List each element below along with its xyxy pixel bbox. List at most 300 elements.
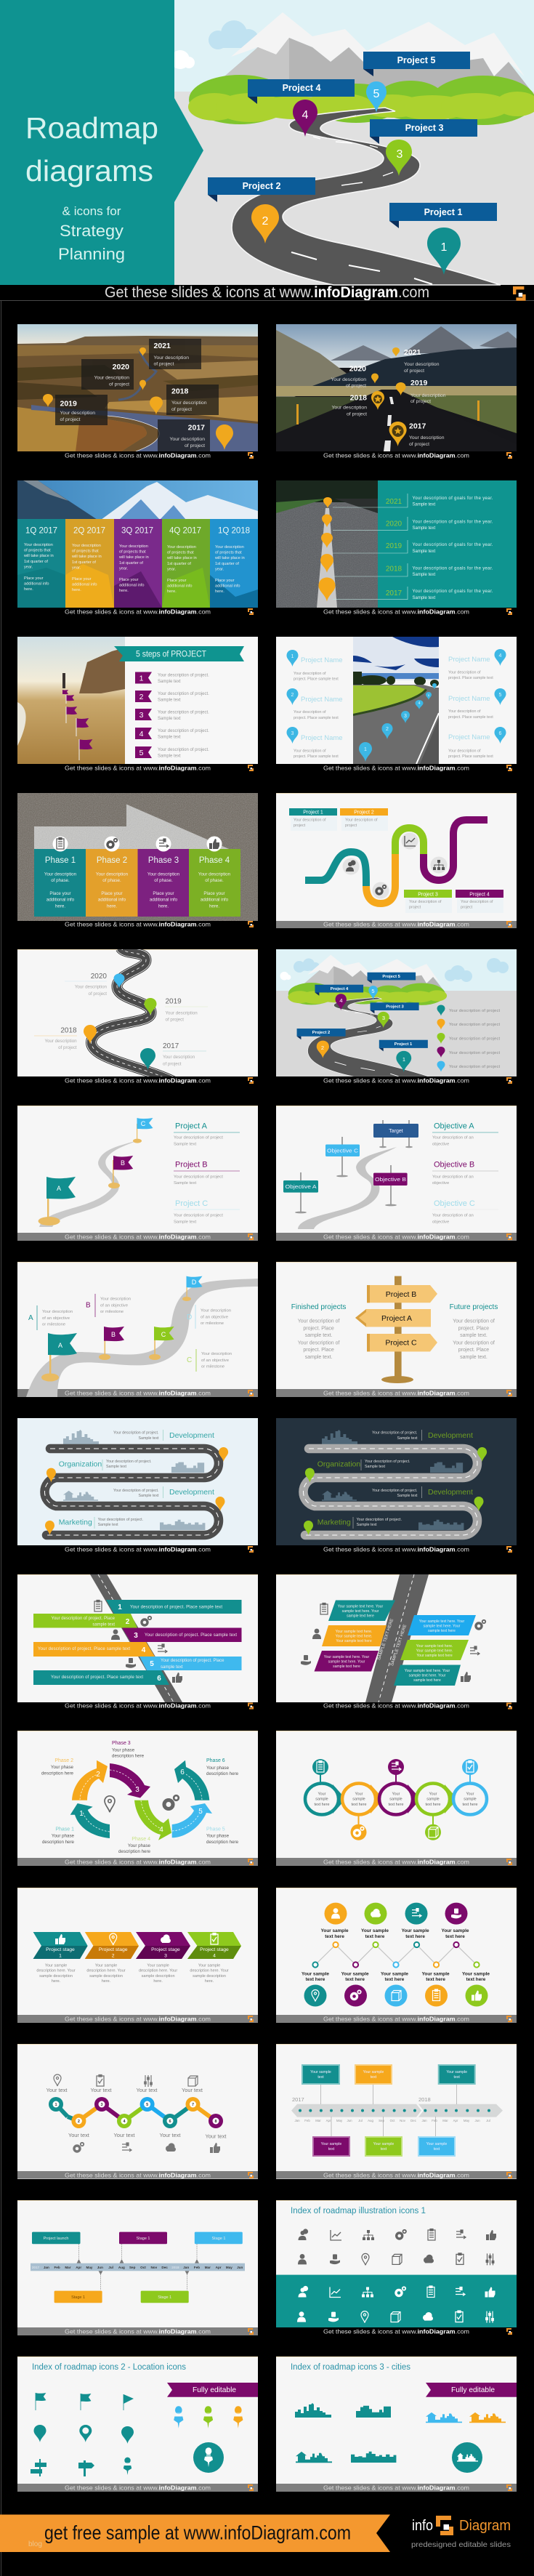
- slide 1: photo timeline with dark year boxes: Your description: [94, 375, 129, 381]
- phase descriptions: of phase.: [205, 878, 224, 883]
- phase texts: Your phase: [52, 1834, 75, 1839]
- block text: Your sample text here.: [416, 1644, 453, 1649]
- pin numbers: 6: [499, 731, 502, 736]
- step descriptions: Sample text: [158, 698, 181, 702]
- wave connectors: [56, 2104, 216, 2121]
- objective list: Objective A: [434, 1122, 474, 1130]
- side icons: [94, 1601, 182, 1683]
- month strip: 2017: [32, 2266, 40, 2269]
- slide 5: beach photo with five steps list: 4: [139, 730, 144, 738]
- phase texts: Your phase: [128, 1843, 151, 1848]
- footer bar: [17, 1858, 258, 1866]
- milestone notes: Your description: [201, 1352, 232, 1356]
- node labels: text here: [325, 1934, 344, 1939]
- finished projects: Your description of: [298, 1340, 340, 1346]
- footer bar: Get these slides & icons at www. infoDiagram .com: [323, 608, 469, 615]
- signpost: [355, 1276, 437, 1383]
- milestone notes: A: [28, 1314, 33, 1322]
- slide 1: photo timeline with dark year boxes: of project: [154, 362, 174, 366]
- hero banner and pin labels: [243, 55, 462, 217]
- goal descriptions: Sample text: [413, 596, 436, 600]
- flags: [39, 1118, 153, 1225]
- bar text: Your description of project. Place: [161, 1659, 224, 1663]
- year and month labels: 2017: [292, 2096, 304, 2103]
- category labels: [317, 1431, 473, 1526]
- banner labels: Project 4: [331, 987, 349, 991]
- project label boxes: Your description of: [409, 900, 442, 904]
- footer bar: Get these slides & icons at www. infoDiagram .com: [65, 2327, 211, 2335]
- project label boxes: [289, 808, 503, 913]
- bar text: Your description of project. Place sample text: [145, 1633, 237, 1638]
- phase descriptions: additional info: [201, 898, 229, 903]
- phase titles: [45, 856, 230, 863]
- star pins: [371, 347, 407, 446]
- footer bar: [276, 2484, 517, 2492]
- step descriptions: Sample text: [158, 680, 181, 684]
- objective list: [432, 1122, 498, 1225]
- month strip: Dec: [161, 2266, 168, 2269]
- node labels: [46, 2087, 226, 2140]
- objective list: Your description of an: [432, 1175, 474, 1180]
- slide 12: road signs with objectives: [276, 1106, 517, 1241]
- phase texts: Phase 1: [55, 1827, 74, 1832]
- column descriptions: additional info: [72, 583, 97, 587]
- project descriptions: project. Place sample text: [294, 754, 339, 759]
- project label boxes: project: [345, 824, 357, 828]
- footer bar: Get these slides & icons at www. infoDiagram .com: [323, 1390, 469, 1397]
- descriptions: of project: [163, 1062, 182, 1067]
- quarter headings: 2Q 2017: [73, 526, 105, 535]
- phase descriptions: Your description: [147, 872, 179, 877]
- parallelogram blocks: [314, 1601, 476, 1686]
- slide 2: highway photo timeline with star pins: Your description: [331, 377, 366, 382]
- year labels: 2020: [91, 973, 107, 981]
- future projects: Future projects: [450, 1303, 498, 1311]
- teal ribbon heading: [114, 646, 244, 661]
- nodes: 8: [214, 2120, 217, 2124]
- ring text: [315, 1792, 477, 1807]
- column descriptions: Place your: [215, 579, 235, 583]
- road descriptions: Your description of project.: [357, 1518, 402, 1522]
- stage boxes: Stage 1: [137, 2237, 150, 2241]
- stage boxes: Stage 1: [212, 2237, 225, 2241]
- infoDiagram brand logo: predesigned editable slides: [411, 2540, 511, 2549]
- column descriptions: 1st quarter of: [24, 560, 48, 564]
- project descriptions: project. Place sample text: [294, 677, 339, 682]
- dark icon rows: [298, 2229, 496, 2265]
- goal descriptions: Sample text: [413, 573, 436, 577]
- slide 2: highway photo timeline with star pins: Your description: [409, 435, 445, 440]
- timeline arrows: [291, 2104, 503, 2117]
- footer bar: Get these slides & icons at www. infoDiagram .com: [65, 1390, 211, 1397]
- road descriptions: Sample text: [139, 1494, 159, 1498]
- orange call-to-action ribbon: get free sample at www.infoDiagram.com: [44, 2522, 351, 2544]
- column descriptions: additional info: [119, 583, 145, 587]
- project label boxes: Project 4: [469, 893, 490, 897]
- node labels: Your sample: [302, 1971, 329, 1977]
- slide 5: beach photo with five steps list: 2: [139, 693, 144, 701]
- quarter headings: 4Q 2017: [169, 526, 201, 535]
- category labels: Development: [169, 1431, 214, 1440]
- year and month labels: Mar: [442, 2119, 448, 2122]
- chevron labels: Project stage: [99, 1947, 128, 1952]
- orange call-to-action ribbon: blog: [28, 2540, 42, 2548]
- bar numbers: 2: [126, 1618, 130, 1626]
- node labels: Your sample: [361, 1928, 389, 1933]
- bar text: Your description of project. Place: [51, 1617, 116, 1621]
- phase titles: Phase 4: [199, 856, 230, 865]
- phase descriptions: Your description: [44, 872, 76, 877]
- month strip: Mar: [205, 2266, 211, 2269]
- serpentine road: [303, 1449, 477, 1535]
- slide 19: circular phase arrows: [17, 1731, 258, 1866]
- descriptions: Your description: [166, 1010, 198, 1015]
- phase descriptions: here.: [209, 903, 219, 909]
- footer bar: [17, 1545, 258, 1553]
- column descriptions: of projects that: [215, 551, 242, 555]
- slide 5: beach photo with five steps list: 5: [139, 749, 144, 757]
- finished projects: sample text.: [305, 1355, 333, 1360]
- project label boxes: Project 2: [354, 810, 374, 816]
- slide 9: vertical winding road timeline: [17, 948, 258, 1084]
- step descriptions: Your description of project.: [158, 729, 209, 733]
- center photo: [353, 637, 439, 764]
- arrow numbers: 5: [198, 1808, 203, 1816]
- phase texts: Phase 3: [112, 1741, 131, 1746]
- road descriptions: Sample text: [365, 1465, 385, 1469]
- step descriptions: Your description of project.: [158, 748, 209, 752]
- project list: Your description of project: [174, 1175, 223, 1180]
- bar numbers: [118, 1603, 161, 1683]
- project label boxes: Your description of: [461, 900, 493, 904]
- future projects: sample text.: [460, 1355, 488, 1360]
- footer bar: Get these slides & icons at www. infoDiagram .com: [65, 452, 211, 459]
- descriptions: of project: [89, 991, 107, 997]
- legend: Your description of project: [449, 1009, 500, 1013]
- goal descriptions: Your description of goals for the year.: [413, 566, 493, 571]
- nodes: [312, 1942, 480, 1968]
- footer bar: Get these slides & icons at www. infoDiagram .com: [65, 920, 211, 927]
- road descriptions: Your description of project.: [113, 1489, 158, 1493]
- numbered steps: [135, 672, 152, 758]
- phase descriptions: here.: [158, 903, 169, 909]
- pin numbers: 2: [291, 693, 294, 698]
- pins: [304, 1447, 487, 1535]
- column descriptions: will take place in: [23, 554, 54, 558]
- nodes: [49, 2097, 223, 2128]
- skylines: [322, 1430, 464, 1530]
- block text: Your sample text here: [416, 1654, 453, 1658]
- phase texts: Phase 2: [54, 1758, 73, 1763]
- project names: Project Name: [448, 695, 490, 703]
- years and descriptions: 2017: [409, 422, 426, 430]
- phase texts: Phase 6: [206, 1758, 225, 1763]
- slide 7: asphalt arrow with four phases: [17, 793, 258, 928]
- slide 10: illustrated road with legend: 2: [321, 1045, 324, 1051]
- column descriptions: Place your: [167, 579, 187, 583]
- ring text: sample: [426, 1798, 440, 1802]
- node icons: [54, 2074, 220, 2153]
- slide 1: photo timeline with dark year boxes: Your description: [154, 355, 189, 361]
- slide 22: zigzag timeline with icon circles: [276, 1888, 517, 2023]
- month strip: Apr: [76, 2266, 81, 2269]
- pin numbers: 1: [364, 747, 367, 752]
- node labels: Your sample: [422, 1971, 450, 1977]
- node labels: text here: [466, 1977, 486, 1982]
- years: 2019: [386, 542, 402, 550]
- block text: sample text here. Your: [409, 1674, 446, 1678]
- column descriptions: additional info: [167, 584, 193, 589]
- block text: Your sample text here. Your: [338, 1605, 383, 1609]
- future projects: Your description of: [453, 1340, 495, 1346]
- phase descriptions: Place your: [101, 891, 123, 896]
- project label boxes: project: [461, 906, 473, 910]
- pin numbers: 3: [404, 714, 407, 719]
- arrows: [70, 1760, 212, 1840]
- orange call-to-action ribbon: [0, 2515, 390, 2552]
- ring text: sample: [315, 1798, 328, 1802]
- footer bar: Get these slides & icons at www. infoDiagram .com: [323, 1858, 469, 1865]
- grey road: [298, 1147, 397, 1229]
- month strip: May: [226, 2266, 232, 2269]
- stage descriptions: description here. Your: [190, 1969, 229, 1973]
- project list: Project C: [175, 1199, 208, 1208]
- column descriptions: Place your: [24, 576, 44, 581]
- column descriptions: Your description: [24, 543, 53, 547]
- footer bar: [17, 1233, 258, 1241]
- slide 10: illustrated road with legend: [276, 949, 517, 1084]
- stage descriptions: Your sample: [147, 1963, 169, 1968]
- node labels: text here: [306, 1977, 325, 1982]
- column descriptions: will take place in: [214, 556, 245, 560]
- month dots: [299, 2109, 490, 2112]
- pin numbers: 5: [428, 693, 430, 697]
- slide 2: highway photo timeline with star pins: of project: [347, 412, 367, 417]
- phase texts: Phase 4: [132, 1837, 150, 1842]
- node labels: Your text: [206, 2133, 226, 2140]
- project names: Project Name: [301, 696, 343, 704]
- node labels: Your text: [91, 2087, 111, 2093]
- node labels: text here: [405, 1934, 425, 1939]
- project names: Project Name: [301, 656, 343, 664]
- descriptions: of project: [58, 1045, 77, 1050]
- year and month labels: Jun: [347, 2119, 352, 2122]
- road descriptions: Sample text: [357, 1523, 377, 1527]
- nodes: 2: [78, 2120, 80, 2124]
- signposts: Objective B: [375, 1178, 406, 1183]
- pin numbers: 4: [499, 653, 502, 659]
- slide 14: wooden signpost with finished and future projects: [276, 1262, 517, 1397]
- node labels: Your text: [68, 2132, 89, 2138]
- block text: Your sample text here.: [336, 1630, 372, 1634]
- objective list: Objective B: [434, 1160, 474, 1169]
- project label boxes: Your description of: [294, 818, 326, 823]
- column descriptions: here.: [72, 588, 81, 592]
- phase descriptions: additional info: [46, 898, 75, 903]
- node labels: Your text: [182, 2087, 203, 2093]
- flags: C: [161, 1331, 166, 1338]
- month strip: Nov: [150, 2266, 158, 2269]
- goal descriptions: Your description of goals for the year.: [413, 496, 493, 501]
- years and descriptions: 2017: [188, 423, 205, 432]
- year and month labels: 2018: [418, 2096, 431, 2103]
- project names: Project Name: [301, 734, 343, 742]
- footer bar: Get these slides & icons at www. infoDiagram .com: [323, 765, 469, 772]
- stage descriptions: Your sample: [45, 1963, 67, 1968]
- goal descriptions: Your description of goals for the year.: [413, 520, 493, 524]
- descriptions: Your description: [44, 1039, 77, 1044]
- category labels: Development: [428, 1488, 473, 1497]
- footer bar: Get these slides & icons at www. infoDiagram .com: [65, 765, 211, 772]
- finished projects: Your description of: [298, 1319, 340, 1324]
- slide 24: monthly arrow timeline with boxes: Your sample: [310, 2070, 331, 2074]
- year labels: 2018: [60, 1027, 77, 1035]
- bar numbers: 1: [118, 1603, 122, 1611]
- month strip: Jan: [183, 2266, 189, 2269]
- pin numbers: 5: [499, 693, 502, 698]
- stage descriptions: here.: [153, 1979, 163, 1984]
- column descriptions: here.: [167, 589, 177, 594]
- project descriptions: Your description of: [294, 710, 326, 715]
- project descriptions: Your description of: [448, 709, 481, 714]
- goal descriptions: Sample text: [413, 550, 436, 554]
- road descriptions: [357, 1431, 418, 1527]
- signpost: Project B: [386, 1290, 416, 1299]
- column descriptions: Your description: [167, 545, 196, 550]
- bar text: Your description of project. Place sample text: [38, 1647, 130, 1651]
- purple ribbon: Fully editable: [193, 2386, 236, 2394]
- footer bar: [17, 2015, 258, 2023]
- skylines: [63, 1430, 205, 1530]
- column descriptions: will take place in: [71, 555, 102, 559]
- footer bar: [17, 451, 258, 459]
- phase texts: description here: [118, 1849, 151, 1854]
- objective list: Your description of an: [432, 1214, 474, 1218]
- milestone notes: Your description: [201, 1309, 231, 1313]
- column descriptions: will take place in: [118, 555, 149, 560]
- stage descriptions: here.: [52, 1979, 61, 1984]
- footer bar: [276, 764, 517, 772]
- footer bar: [17, 1702, 258, 1710]
- arrow numbers: 3: [135, 1786, 139, 1794]
- ring text: Your: [429, 1792, 437, 1796]
- flags: D: [192, 1279, 197, 1286]
- objective list: objective: [432, 1181, 450, 1186]
- icon circles: [304, 1903, 488, 2006]
- phase descriptions: Place your: [203, 891, 225, 896]
- slide 4: road photo with five year rows on teal panel: [276, 480, 517, 616]
- objective list: Objective C: [434, 1199, 475, 1208]
- slide title: Index of roadmap illustration icons 1: [291, 2207, 426, 2215]
- column descriptions: year.: [24, 565, 33, 569]
- slide 6: road photo with six numbered projects: [276, 637, 517, 772]
- future projects: [450, 1303, 498, 1360]
- node labels: Your text: [114, 2132, 134, 2138]
- year and month labels: Nov: [400, 2119, 406, 2122]
- banner labels: Project 5: [382, 975, 401, 979]
- slanted road: [365, 1574, 429, 1702]
- column descriptions: additional info: [24, 581, 49, 586]
- road descriptions: Your description of project.: [113, 1431, 158, 1436]
- slide 24: monthly arrow timeline with boxes: text: [434, 2147, 440, 2152]
- slide 5: beach photo with five steps list: [17, 637, 258, 772]
- phase descriptions: Place your: [49, 891, 71, 896]
- road descriptions: [98, 1431, 159, 1527]
- future projects: Your description of: [453, 1319, 495, 1324]
- descriptions: of project: [166, 1017, 184, 1022]
- color bars: [33, 1600, 241, 1685]
- painted arrow: [34, 804, 229, 849]
- arrow numbers: 4: [159, 1826, 163, 1834]
- phase texts: description here: [112, 1754, 145, 1759]
- milestone notes: of an objective: [201, 1315, 229, 1319]
- column descriptions: Your description: [119, 544, 148, 549]
- stage boxes: Stage 1: [71, 2295, 85, 2300]
- milestone notes: Your description: [100, 1297, 131, 1302]
- slide 10: illustrated road with legend: 4: [339, 997, 343, 1004]
- chevron labels: 1: [59, 1954, 62, 1959]
- signpost: Project A: [381, 1314, 412, 1323]
- column descriptions: Place your: [72, 577, 92, 581]
- milestone notes: of an objective: [100, 1303, 129, 1308]
- path icons: [343, 833, 448, 898]
- phase descriptions: Your description: [96, 872, 128, 877]
- project descriptions: project. Place sample text: [294, 716, 339, 720]
- year and month labels: Jul: [358, 2119, 363, 2122]
- goal descriptions: Sample text: [413, 503, 436, 507]
- stage descriptions: sample description: [142, 1974, 175, 1979]
- slide 2: highway photo timeline with star pins: Your description: [404, 362, 440, 367]
- pin numbers: 3: [291, 731, 294, 736]
- slide 24: monthly arrow timeline with boxes: Your sample: [373, 2142, 394, 2146]
- step descriptions: [158, 673, 209, 759]
- arrow numbers: [79, 1768, 203, 1834]
- chevron labels: 2: [112, 1954, 115, 1959]
- footer bar: [17, 1389, 258, 1397]
- year and month labels: Dec: [410, 2119, 417, 2122]
- phase descriptions: here.: [107, 903, 117, 909]
- month strip: Feb: [54, 2266, 60, 2269]
- footer bar: Get these slides & icons at www. infoDiagram .com: [323, 2484, 469, 2492]
- step descriptions: Sample text: [158, 736, 181, 740]
- pin icons: [33, 2425, 134, 2444]
- year and month labels: Jul: [486, 2119, 490, 2122]
- slide 24: monthly arrow timeline with boxes: Your sample: [321, 2142, 341, 2146]
- block text: sample text here. Your: [342, 1609, 379, 1614]
- years and descriptions: 2019: [60, 400, 77, 408]
- month strip: Apr: [216, 2266, 222, 2269]
- footer bar: [17, 920, 258, 928]
- phase descriptions: additional info: [98, 898, 126, 903]
- icon circles: [312, 1759, 478, 1840]
- column descriptions: Your description: [215, 545, 244, 550]
- slide 1: photo timeline with dark year boxes: Your description: [170, 437, 205, 442]
- year and month labels: Feb: [432, 2119, 437, 2122]
- month strip: Jun: [97, 2266, 103, 2269]
- arrow numbers: 2: [96, 1771, 100, 1779]
- month strip: Jan: [44, 2266, 49, 2269]
- phase texts: Phase 5: [206, 1827, 225, 1832]
- hero banner and pin labels: Project 4: [283, 83, 320, 93]
- footer bar: [276, 1702, 517, 1710]
- chevron labels: Project stage: [200, 1947, 229, 1952]
- bar text: Your description of project. Place sample text: [130, 1605, 222, 1609]
- milestone notes: Your description: [42, 1310, 73, 1314]
- slide 1: photo timeline with dark year boxes: Your description: [60, 411, 95, 416]
- month strip: [31, 2263, 245, 2271]
- road descriptions: Your description of project.: [106, 1460, 152, 1464]
- slide 2: highway photo timeline with star pins: of project: [404, 369, 424, 374]
